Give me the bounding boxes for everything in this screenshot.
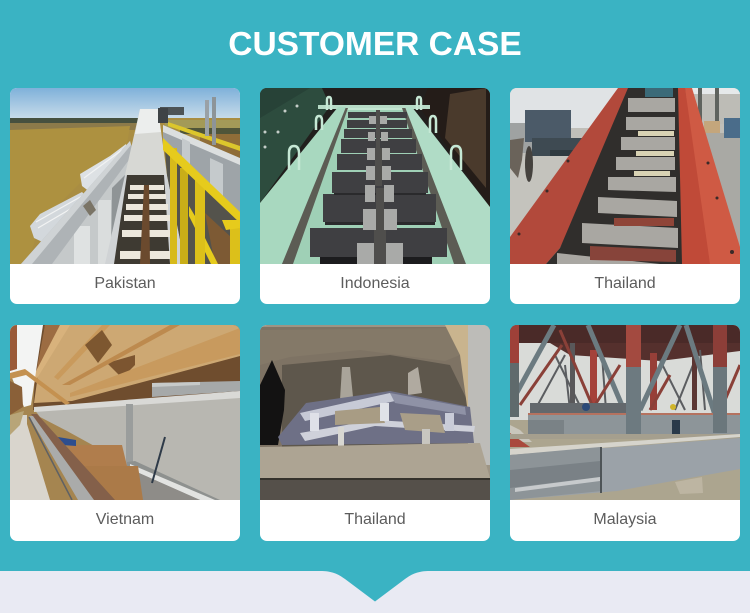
panel: Thailand case 2 bbox=[260, 325, 490, 541]
chain rollers bbox=[357, 116, 403, 264]
panel: Vietnam case bbox=[10, 325, 240, 541]
photo: conveyor across farmland bbox=[10, 88, 240, 264]
label: Indonesia: Indonesia bbox=[340, 275, 410, 292]
rails bbox=[31, 414, 115, 500]
photo: scraper chain in green trough bbox=[260, 88, 490, 264]
photo: grey conveyor casing under red steel frame bbox=[510, 325, 740, 500]
casing cover bbox=[125, 109, 167, 175]
bridge and rails bbox=[10, 415, 50, 500]
right walkway and rails bbox=[163, 126, 240, 264]
photo: chain embedded in material bbox=[260, 325, 490, 500]
wood ceiling bbox=[33, 325, 240, 410]
panel: Malaysia case bbox=[510, 325, 740, 541]
panel: Indonesia case bbox=[260, 88, 490, 304]
label: Thailand: Thailand bbox=[594, 275, 656, 292]
panel: Pakistan case bbox=[10, 88, 240, 304]
title: CUSTOMER CASE bbox=[228, 26, 522, 63]
label: Pakistan: Pakistan bbox=[94, 275, 156, 292]
label: Malaysia: Malaysia bbox=[593, 511, 657, 528]
label: Thailand: Thailand bbox=[344, 511, 406, 528]
wood boxes below bbox=[67, 445, 127, 466]
conveyor casing bbox=[34, 391, 240, 500]
photo: red scraper conveyor in workshop bbox=[510, 88, 740, 264]
label: Vietnam: Vietnam bbox=[96, 511, 154, 528]
bottom band with teal arrow notch bbox=[0, 571, 750, 613]
panel: Thailand case 1 bbox=[510, 88, 740, 304]
photo: enclosed conveyor under wood roof bbox=[10, 325, 240, 500]
grain silos bbox=[80, 144, 128, 192]
steel beam bbox=[21, 141, 134, 264]
